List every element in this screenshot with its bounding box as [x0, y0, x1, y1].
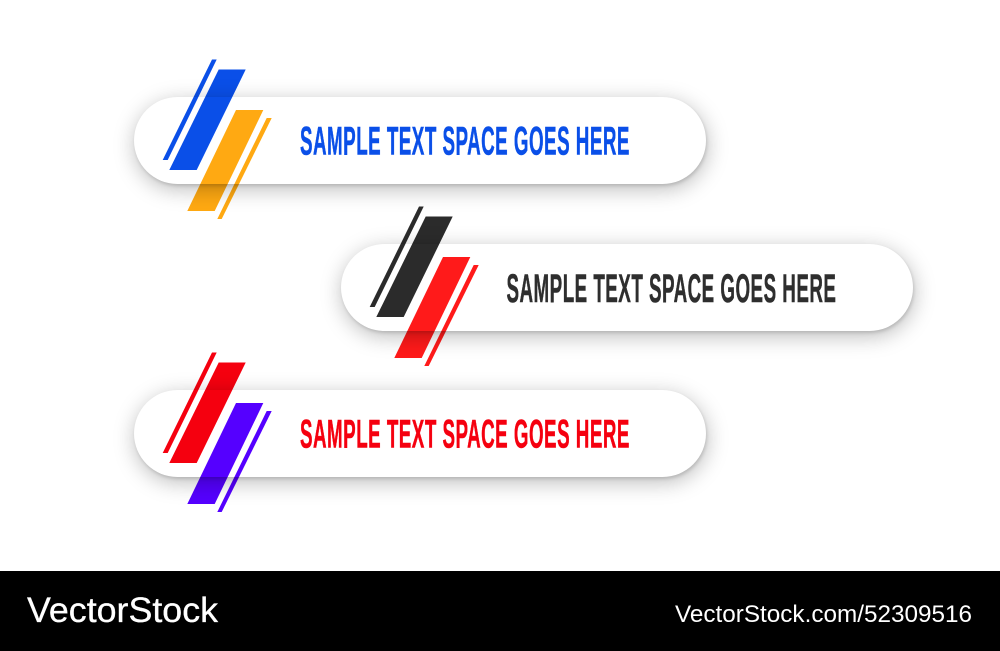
footer image id: VectorStock.com/52309516: [675, 601, 972, 628]
footer bar: [0, 571, 1000, 651]
icon: blue and orange slanted bars: [162, 60, 272, 219]
text: dark label: SAMPLE TEXT SPACE GOES HERE: [506, 266, 836, 310]
icon: red and purple slanted bars: [162, 352, 272, 512]
banner: red and purple: [124, 352, 718, 512]
banner: black and red: [331, 206, 925, 366]
text: red label: SAMPLE TEXT SPACE GOES HERE: [300, 412, 630, 456]
banner: blue and orange: [124, 60, 718, 219]
text: blue label: SAMPLE TEXT SPACE GOES HERE: [300, 119, 630, 163]
icon: black and red slanted bars: [370, 206, 479, 366]
footer logo text: VectorStock: [27, 591, 219, 630]
